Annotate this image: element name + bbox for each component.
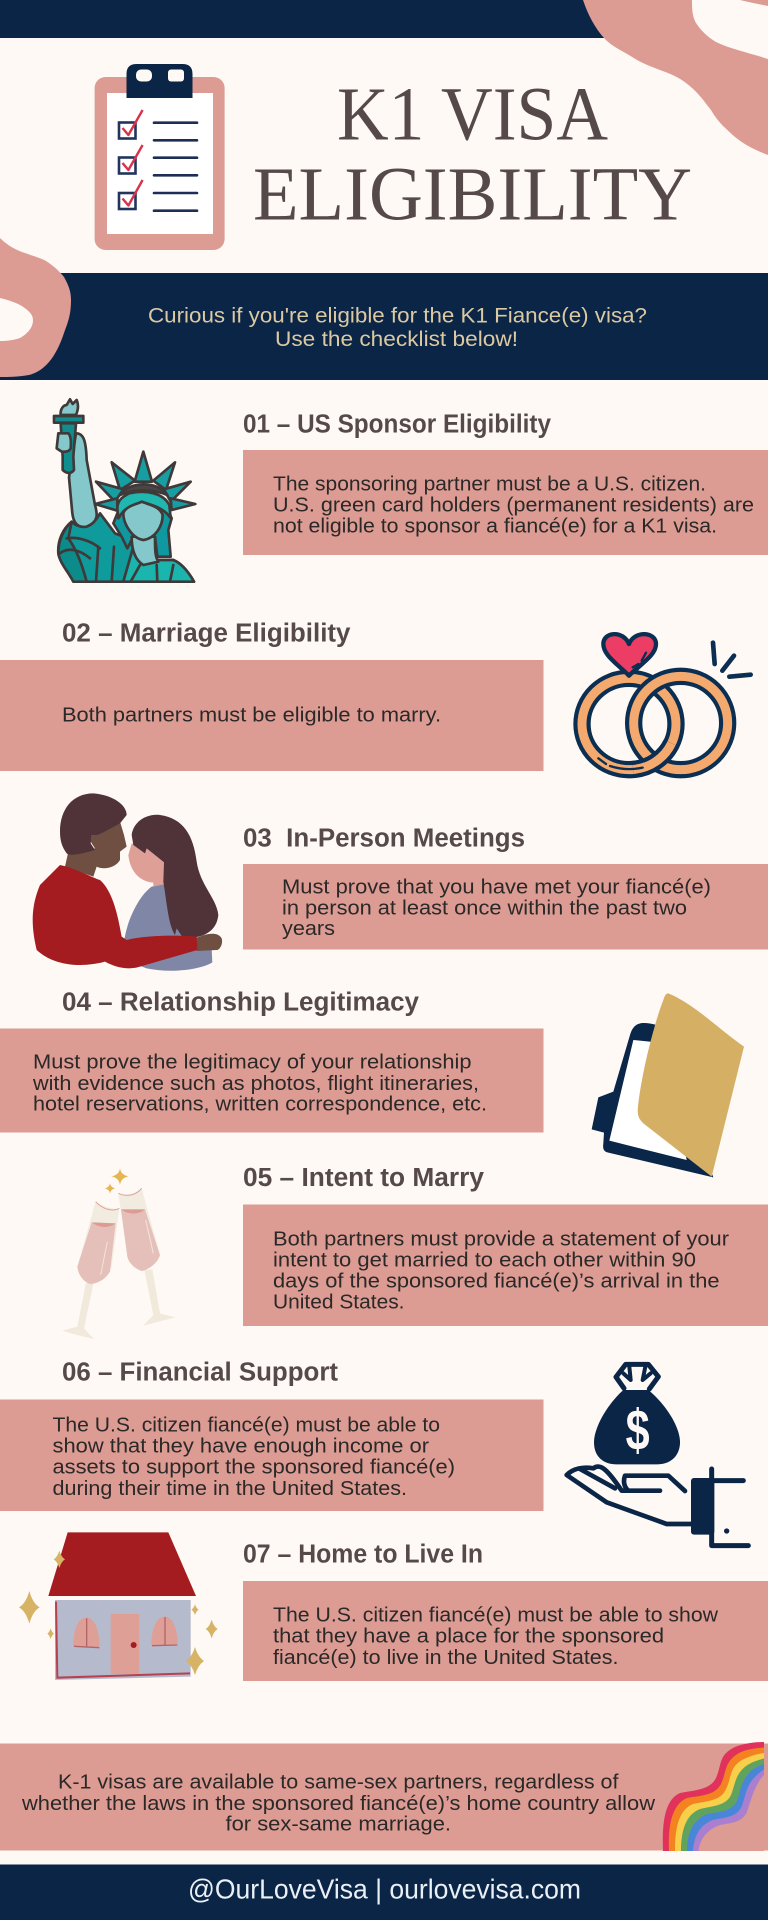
icon: rainbow wave (663, 1742, 764, 1851)
icon: house with sparkles (19, 1532, 218, 1680)
icon: money bag on open hand (567, 1364, 748, 1546)
note text (21, 1770, 655, 1836)
icon: embracing couple (33, 793, 222, 971)
top navy band (0, 0, 768, 38)
heading 06: 06 – Financial Support (62, 1358, 339, 1386)
heading 07: 07 – Home to Live In (243, 1540, 483, 1568)
icon: statue of liberty (54, 399, 195, 582)
decorative blob: left (0, 238, 71, 377)
note text: K-1 visas are available to same-sex partners, regardless of (58, 1770, 619, 1794)
section 07: home to live in (19, 1532, 768, 1681)
text box 04: Must prove the legitimacy of your relationship (33, 1050, 471, 1074)
text box 01: not eligible to sponsor a fiancé(e) for a K1 visa. (273, 514, 717, 538)
section 03: in-person meetings (33, 793, 768, 971)
text box 05: days of the sponsored fiancé(e)’s arrival in the (273, 1270, 720, 1292)
heading 04: 04 – Relationship Legitimacy (62, 988, 420, 1016)
text box 01: The sponsoring partner must be a U.S. citizen. (273, 472, 706, 496)
text box 01: U.S. green card holders (permanent residents) are (273, 494, 754, 516)
section 04: relationship legitimacy (0, 988, 744, 1177)
icon: champagne glasses (62, 1168, 175, 1339)
heading 02: 02 – Marriage Eligibility (62, 620, 351, 648)
text box 01 (243, 450, 768, 555)
icon: money bag on open hand: $ (626, 1398, 650, 1462)
text box 07 (243, 1581, 768, 1681)
title: ELIGIBILITY (253, 152, 692, 236)
section 01: US sponsor eligibility (54, 399, 768, 582)
text box 06: The U.S. citizen fiancé(e) must be able to (52, 1414, 440, 1436)
heading 05: 05 – Intent to Marry (243, 1164, 485, 1192)
text box 02: Both partners must be eligible to marry. (62, 704, 441, 726)
text box 06: show that they have enough income or (52, 1434, 429, 1458)
text box 03 (243, 864, 768, 950)
text box 06: during their time in the United States. (52, 1477, 407, 1500)
section 02: marriage eligibility (0, 620, 751, 771)
note panel: same-sex partners (0, 1742, 768, 1851)
icon: clipboard checklist (95, 64, 225, 250)
text box 03: in person at least once within the past two (282, 896, 687, 920)
text box 07: that they have a place for the sponsored (273, 1624, 664, 1648)
text box 02 (0, 660, 544, 771)
text box 04: with evidence such as photos, flight itineraries, (32, 1072, 479, 1095)
text box 04 (0, 1028, 544, 1132)
intro banner (0, 273, 768, 380)
icon: wedding rings (582, 634, 751, 770)
text box 03: years (282, 917, 335, 940)
section 06: financial support (0, 1358, 748, 1546)
note text: for sex-same marriage. (226, 1812, 451, 1836)
title (253, 72, 692, 236)
decorative blob: top right (583, 0, 768, 155)
text box 07: fiancé(e) to live in the United States. (273, 1646, 618, 1669)
intro banner: Curious if you're eligible for the K1 Fiance(e) visa? (148, 304, 647, 328)
title: K1 VISA (337, 72, 608, 156)
heading 03: 03 In-Person Meetings (243, 824, 525, 852)
text box 06 (0, 1400, 544, 1511)
note text: whether the laws in the sponsored fiancé(e)’s home country allow (21, 1792, 655, 1815)
footer band: @OurLoveVisa | ourlovevisa.com (188, 1874, 581, 1904)
text box 06: assets to support the sponsored fiancé(e) (52, 1456, 455, 1478)
text box 05: United States. (273, 1290, 404, 1314)
intro banner: Use the checklist below! (275, 328, 518, 351)
text box 04: hotel reservations, written correspondence, etc. (33, 1092, 487, 1116)
text box 05: intent to get married to each other within 90 (273, 1248, 696, 1272)
section 05: intent to marry (62, 1164, 768, 1339)
heading 01: 01 – US Sponsor Eligibility (243, 410, 552, 438)
text box 05 (243, 1204, 768, 1326)
text box 07: The U.S. citizen fiancé(e) must be able to show (273, 1604, 718, 1626)
text box 05: Both partners must provide a statement of your (273, 1228, 729, 1250)
footer band (0, 1864, 768, 1920)
icon: document folder (592, 993, 744, 1177)
text box 03: Must prove that you have met your fiancé(e) (282, 876, 711, 898)
